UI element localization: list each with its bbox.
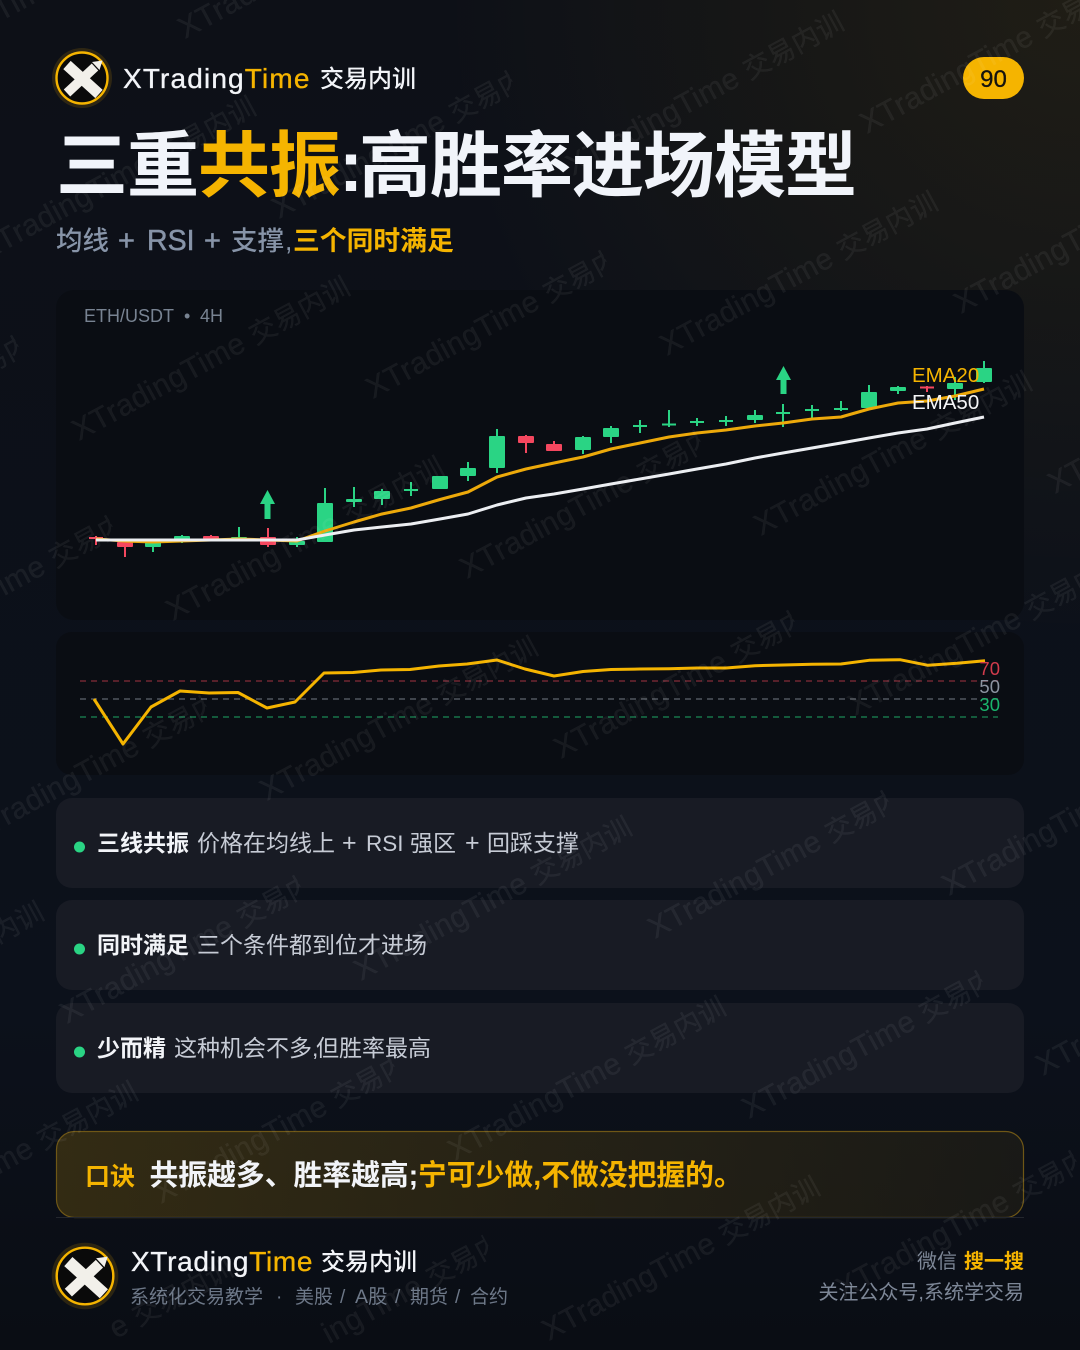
watermark layer: XTradingTime 交易内训 — [55, 853, 344, 1030]
watermark layer: XTradingTime 交易内训 — [749, 365, 1038, 542]
subtitle: 支撑 — [231, 226, 284, 256]
watermark layer: XTradingTime 交易内训 — [455, 408, 744, 585]
card: 三线共振 — [56, 798, 1024, 888]
card: 少而精: 但胜率最高 — [316, 1035, 431, 1061]
EMA labels: EMA50 — [912, 391, 979, 414]
panel: price chart — [56, 290, 1024, 620]
footer tagline: A股 — [355, 1286, 388, 1308]
RSI levels — [979, 658, 1000, 715]
issue number badge — [963, 57, 1024, 99]
card: 同时满足: 三个条件都到位才进场 — [197, 932, 427, 958]
footer right: follow note: 关注公众号,系统学交易 — [818, 1281, 1024, 1304]
chart label: • — [184, 306, 190, 326]
EMA labels: EMA20 — [912, 364, 979, 387]
title: 高胜率进场模型 — [359, 127, 856, 207]
watermark layer: XTradingTime 交易内训 — [267, 48, 556, 225]
footer tagline: / — [395, 1287, 401, 1308]
chart label: ETH/USDT — [84, 306, 174, 326]
title: 三重共振 — [56, 127, 340, 207]
EMA labels — [912, 364, 979, 414]
footer brand: XTradingTime — [131, 1246, 313, 1277]
subtitle: 均线 — [56, 226, 109, 256]
chart label: 4H — [200, 306, 223, 326]
watermark layer: XTradingTime 交易内训 — [361, 228, 650, 405]
brand name: 交易内训 — [320, 66, 416, 93]
issue number badge: 90 — [980, 66, 1007, 93]
card: 三线共振: 价格在均线上 — [197, 830, 335, 856]
candlesticks — [89, 361, 991, 557]
footer tagline: / — [340, 1287, 346, 1308]
callout: 口诀: 口诀 — [85, 1163, 135, 1191]
card: 三线共振: 三线共振 — [97, 830, 189, 856]
subtitle: 三个同时满足 — [293, 226, 454, 256]
card: 少而精: 这种机会不多, — [174, 1035, 318, 1061]
RSI line — [94, 660, 985, 744]
watermark layer: XTradingTime 交易内训 — [349, 810, 638, 987]
subtitle: + — [204, 225, 221, 257]
footer tagline: 合约 — [470, 1286, 508, 1308]
title: : — [339, 127, 362, 207]
watermark layer: XTradingTime 交易内训 — [655, 185, 944, 362]
callout: 口诀 — [56, 1132, 1024, 1218]
RSI levels: 50 — [979, 676, 1000, 697]
footer logo — [52, 1243, 118, 1309]
callout: 口诀: 宁可少做,不做没把握的。 — [418, 1160, 743, 1192]
card: 同时满足: 同时满足 — [97, 932, 189, 958]
watermark layer: XTradingTime 交易内训 — [561, 5, 850, 182]
watermark layer: ingTime 交易内训 — [317, 1212, 533, 1350]
footer tagline: · — [276, 1287, 282, 1308]
footer right: wechat: 搜一搜 — [964, 1250, 1024, 1273]
EMA50 line — [96, 417, 984, 540]
card: 少而精 — [56, 1003, 1024, 1093]
subtitle: , — [285, 226, 292, 256]
RSI levels: 30 — [979, 694, 1000, 715]
card: 三线共振: 回踩支撑 — [487, 830, 579, 856]
watermark layer: XTradingTime 交易内训 — [255, 630, 544, 807]
card: 三线共振: 强区 — [410, 830, 456, 856]
watermark layer: XTradingTime 交易内训 — [549, 588, 838, 765]
card: 三线共振: + — [465, 829, 480, 857]
watermark layer: XTradingTime 交易内训 — [443, 990, 732, 1167]
card: 三线共振: + — [342, 829, 357, 857]
subtitle: RSI — [147, 225, 195, 257]
subtitle: + — [118, 225, 135, 257]
callout: 口诀: 共振越多、胜率越高; — [150, 1160, 418, 1192]
panel: RSI chart — [56, 632, 1024, 775]
footer brand: 交易内训 — [321, 1249, 417, 1276]
watermark layer: XTradingTime 交易内训 — [537, 1170, 826, 1347]
watermark layer: XTradingTime 交易内训 — [67, 270, 356, 447]
watermark layer: XTradingTime 交易内训 — [737, 948, 1026, 1125]
card: 三线共振: RSI — [366, 831, 404, 856]
brand name: XTradingTime — [123, 63, 311, 94]
watermark layer: XTradingTime 交易内训 — [149, 1033, 438, 1210]
footer tagline: 期货 — [410, 1286, 448, 1308]
watermark layer: XTradingTime 交易内训 — [643, 768, 932, 945]
header logo — [52, 48, 112, 108]
footer right: wechat: 微信 — [917, 1250, 957, 1273]
footer tagline: / — [455, 1287, 461, 1308]
entry arrow 1 — [260, 490, 275, 519]
footer tagline: 系统化交易教学 — [130, 1287, 263, 1308]
watermark layer: e 交易内训 — [104, 1251, 239, 1345]
footer tagline: 美股 — [295, 1286, 333, 1308]
watermark layer: XTradingTime 交易内训 — [161, 450, 450, 627]
RSI levels: 70 — [979, 658, 1000, 679]
EMA20 line — [96, 389, 984, 542]
card: 少而精: 少而精 — [97, 1035, 166, 1061]
entry arrow 2 — [776, 366, 791, 394]
card: 同时满足 — [56, 900, 1024, 990]
